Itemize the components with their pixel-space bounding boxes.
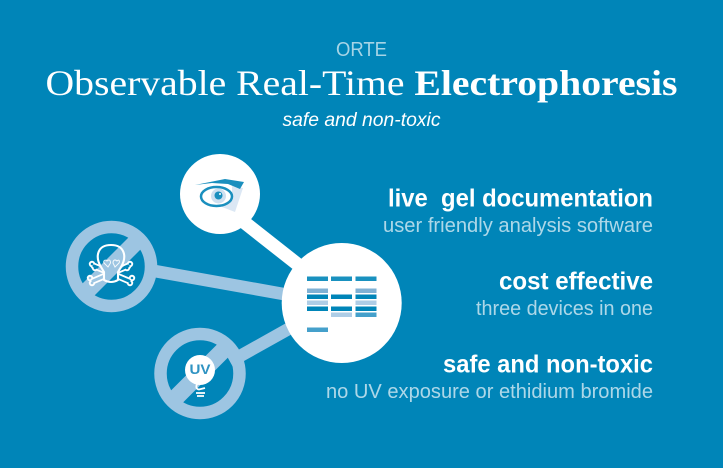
prohibition slash (172, 346, 228, 402)
feature: live gel documentation: live gel documentation (388, 184, 653, 212)
connector: skull to hub (150, 270, 300, 297)
icon: no UV lamp (160, 334, 240, 413)
heading group (46, 39, 678, 131)
hub: gel icon (282, 243, 402, 363)
feature: safe and non-toxic (326, 350, 653, 403)
feature: safe and non-toxic: safe and non-toxic (443, 350, 653, 378)
feature: live gel documentation: user friendly analysis software (383, 215, 653, 237)
prohibition ring (72, 227, 151, 306)
feature: cost effective: three devices in one (476, 298, 653, 320)
feature: cost effective (476, 268, 653, 320)
connector: eye to hub (235, 215, 320, 282)
feature: live gel documentation (383, 184, 653, 237)
connector: UV to hub (230, 322, 300, 362)
icon: no skull (72, 227, 151, 306)
subtitle: safe and non-toxic (282, 110, 441, 131)
prohibition ring (160, 334, 240, 413)
overline: ORTE: ORTE (336, 39, 387, 61)
skull and crossbones (86, 244, 136, 286)
UV lamp: UV (190, 361, 211, 377)
feature: cost effective: cost effective (499, 268, 653, 296)
prohibition slash (84, 238, 140, 294)
feature: safe and non-toxic: no UV exposure or ethidium bromide (326, 381, 653, 403)
title: Observable Real-Time Electrophoresis (46, 63, 678, 103)
icon: eye (180, 154, 260, 234)
